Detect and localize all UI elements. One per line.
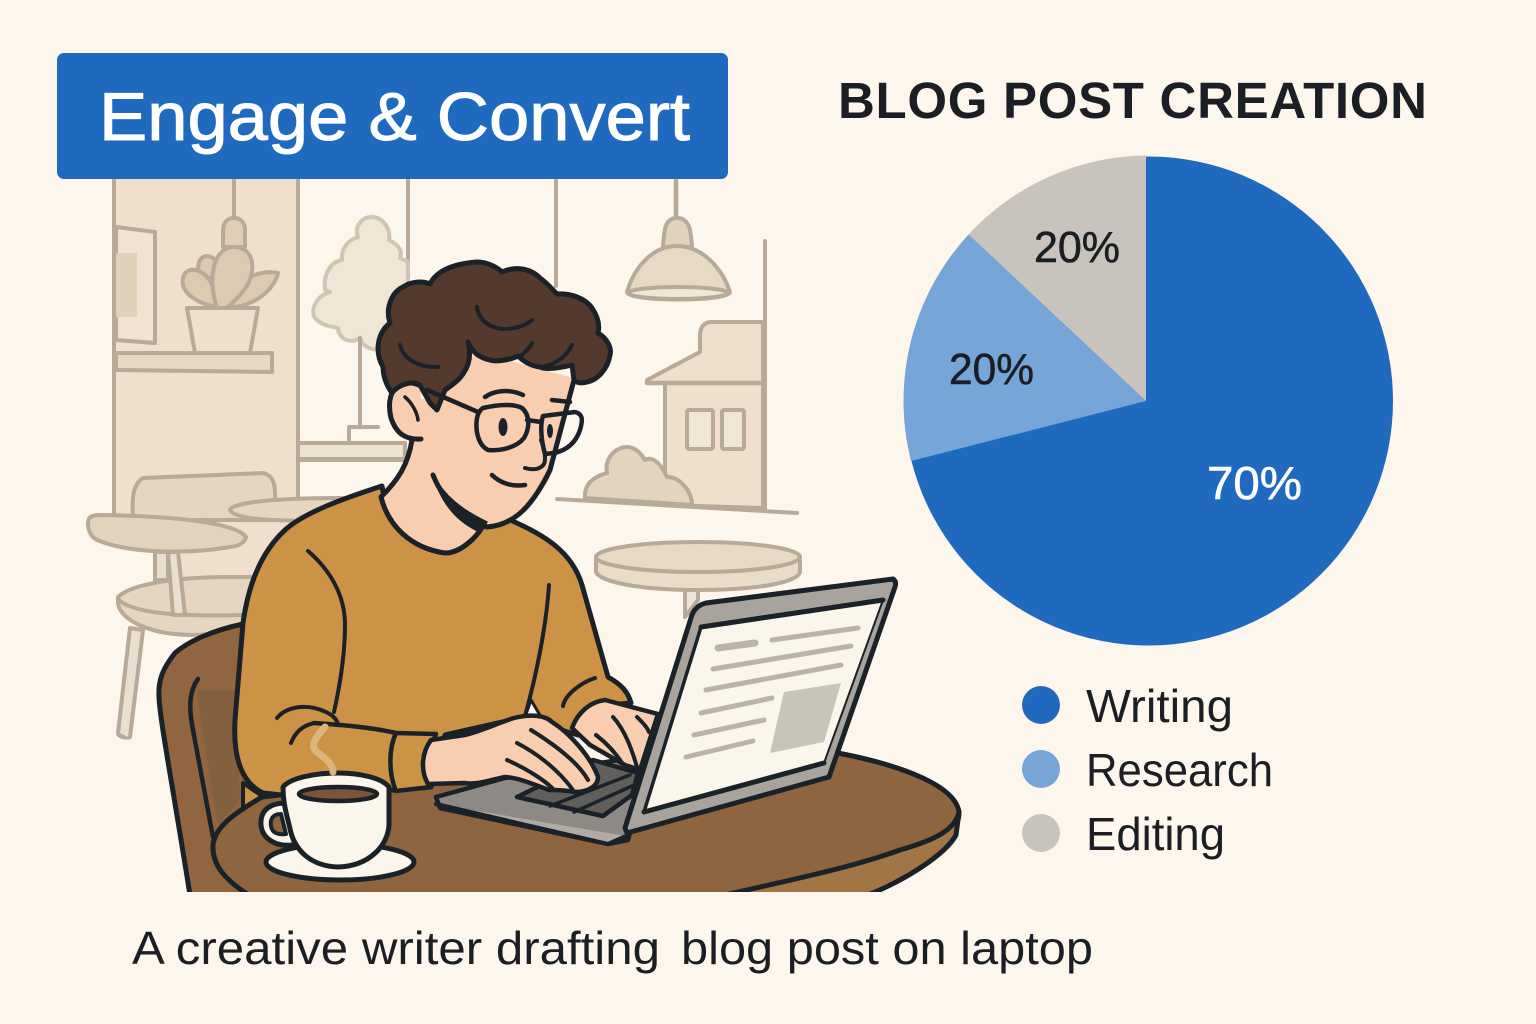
tree in window [313, 217, 408, 443]
slice: editing 20% [968, 156, 1146, 401]
laptop screen lid [625, 579, 896, 833]
caption: blog post on laptop [681, 922, 1093, 974]
potted plant [183, 178, 278, 353]
caption: A creative writer drafting [132, 922, 660, 974]
distant house [647, 322, 763, 508]
bush [585, 447, 692, 505]
sweater hem behind table [241, 780, 262, 807]
neck and collar [381, 440, 483, 553]
smile [492, 475, 525, 486]
chart heading: BLOG POST CREATION [838, 72, 1427, 129]
panel: cafe background scene [88, 178, 800, 738]
wall panel [114, 178, 298, 523]
legend item: editing [1022, 808, 1225, 860]
legend item: writing [1022, 680, 1233, 732]
round wooden table [213, 753, 959, 895]
title text: Engage & Convert [99, 79, 690, 155]
slice: writing 70% [904, 156, 1393, 646]
left hand [423, 716, 598, 792]
caption [132, 922, 1093, 974]
framed picture [116, 227, 155, 343]
legend item: research: Research [1086, 744, 1273, 796]
head and neck [378, 262, 610, 553]
hair curls [400, 307, 572, 367]
cafe table left [88, 515, 246, 552]
ear [390, 383, 421, 439]
infographic canvas [57, 53, 1424, 974]
laptop base and keyboard [436, 755, 650, 844]
document image block [770, 683, 841, 753]
hanging pendant lamp [627, 180, 730, 300]
eyebrows [485, 391, 523, 397]
document text lines [686, 628, 858, 757]
label: 20% editing: 20% [1034, 223, 1120, 272]
slice: research 20% [904, 234, 1146, 461]
cafe table behind [230, 498, 385, 521]
legend item: writing: Writing [1086, 680, 1233, 732]
coffee cup and saucer [261, 773, 414, 880]
legend item: editing: Editing [1086, 808, 1225, 860]
label: 20% research: 20% [949, 345, 1034, 394]
nose [525, 440, 545, 469]
pie chart [904, 156, 1393, 646]
window sill [298, 443, 405, 459]
steam [313, 727, 333, 772]
orange sweater [235, 486, 631, 797]
right hand [572, 700, 658, 770]
wall shelf [116, 353, 272, 372]
cafe table right [596, 542, 800, 617]
legend [1022, 680, 1273, 860]
illustration: writer at laptop [159, 262, 959, 895]
label: 70%: 70% [1207, 457, 1302, 509]
curly hair [378, 262, 610, 410]
title banner [57, 53, 728, 179]
wooden chair [156, 622, 247, 892]
eyes [498, 418, 508, 436]
cafe chair back [133, 473, 298, 610]
ground line [557, 499, 797, 513]
glasses [427, 390, 582, 454]
cafe chair seat and legs [118, 552, 260, 738]
jaw line [433, 380, 574, 527]
window frame lines [298, 180, 765, 510]
